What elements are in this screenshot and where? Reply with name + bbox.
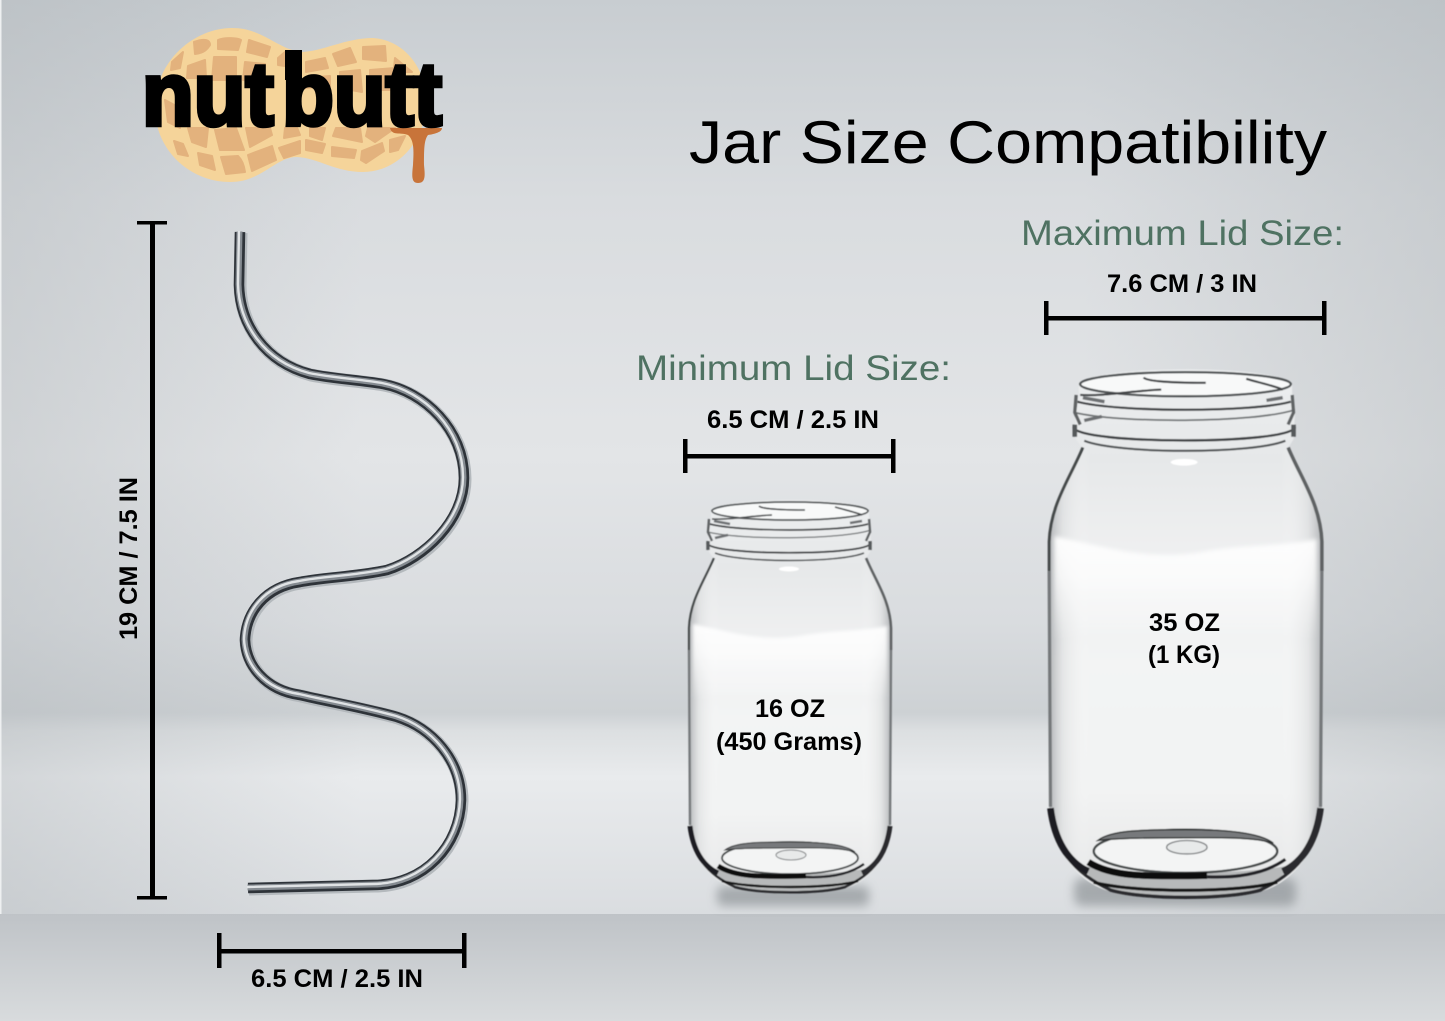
height dimension: 19 CM / 7.5 IN: 19 CM / 7.5 IN <box>115 477 143 640</box>
width dimension: 6.5 CM / 2.5 IN <box>217 933 466 993</box>
large jar 35 oz <box>1049 369 1322 899</box>
height dimension: 19 CM / 7.5 IN <box>115 221 167 900</box>
title: Jar Size Compatibility <box>689 109 1327 176</box>
jar label: 16 OZ <box>755 695 825 723</box>
shadow under small jar <box>717 886 869 906</box>
jar label: (450 Grams) <box>716 728 862 756</box>
logo: nut butt <box>142 28 442 183</box>
width dimension: 6.5 CM / 2.5 IN: 6.5 CM / 2.5 IN <box>251 965 423 993</box>
wordmark: nut butt <box>142 45 442 145</box>
maximum lid dimension <box>1044 270 1326 335</box>
small jar 16 oz <box>689 500 891 893</box>
caramel drip <box>390 128 442 183</box>
jar label: (1 KG) <box>1148 641 1220 669</box>
minimum lid dimension: 6.5 CM / 2.5 IN <box>707 406 879 434</box>
jar label <box>716 695 862 756</box>
floor <box>0 914 1445 1021</box>
shadow under large jar <box>1074 878 1296 906</box>
jar label: 35 OZ <box>1149 609 1220 637</box>
peanut cells <box>165 38 412 174</box>
peanut shell <box>155 28 426 182</box>
wavy metal stirrer <box>238 231 465 889</box>
b ascender <box>285 50 302 80</box>
maximum lid size heading: Maximum Lid Size: <box>1021 214 1344 253</box>
jar label <box>1148 609 1220 669</box>
maximum lid dimension: 7.6 CM / 3 IN <box>1107 270 1257 298</box>
minimum lid dimension <box>683 406 896 473</box>
minimum lid size heading: Minimum Lid Size: <box>636 349 951 388</box>
